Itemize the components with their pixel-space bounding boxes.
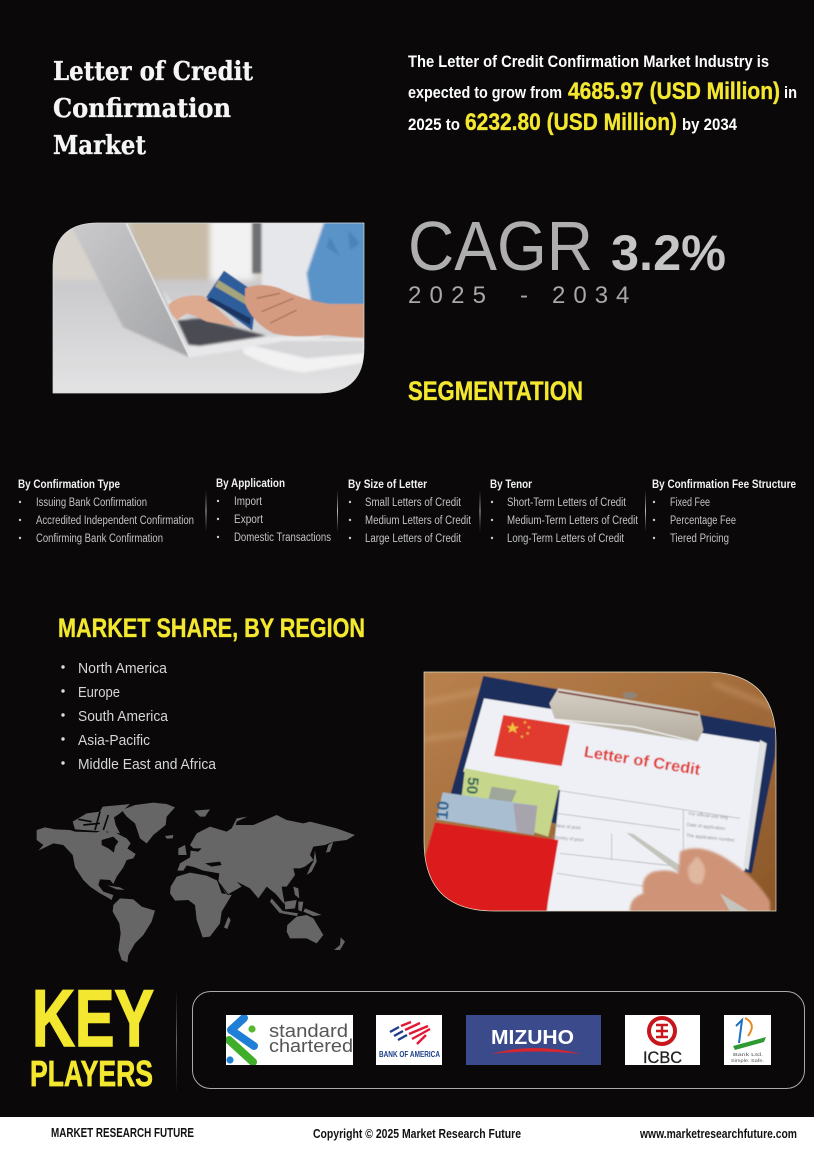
segmentation column: by confirmation type: Issuing Bank Confirmation	[36, 497, 147, 509]
segmentation column: by size of letter	[348, 477, 472, 545]
segmentation column: by tenor	[490, 477, 639, 545]
blurred room background	[54, 223, 348, 392]
market growth statement: The Letter of Credit Confirmation Market Industry is	[408, 52, 769, 71]
footer: MARKET RESEARCH FUTURE	[51, 1126, 194, 1140]
form lines	[557, 791, 740, 887]
banknotes	[460, 768, 559, 837]
photo: letter of credit on clipboard: 10	[432, 800, 453, 820]
shirt and denim	[252, 220, 368, 305]
logo: standard chartered: chartered	[269, 1036, 353, 1056]
logo: regional bank	[724, 1015, 771, 1065]
title: Market	[53, 131, 146, 161]
segmentation column: by tenor: Long-Term Letters of Credit	[507, 533, 625, 545]
region list: Europe	[78, 684, 120, 701]
flag	[494, 715, 570, 766]
logo: icbc: ICBC	[643, 1048, 682, 1067]
form labels	[552, 811, 735, 843]
market growth statement: 4685.97 (USD Million)	[568, 78, 780, 105]
segmentation column: by confirmation fee structure: Tiered Pricing	[670, 533, 729, 545]
segmentation column: by application: Export	[234, 514, 264, 526]
segmentation column: by application: Import	[234, 496, 263, 508]
key players heading	[30, 974, 154, 1094]
segmentation column: by application	[216, 476, 331, 544]
world map	[37, 803, 355, 962]
logo: icbc	[625, 1015, 700, 1067]
logo: bank of america: BANK OF AMERICA	[379, 1050, 440, 1059]
photo: hands with credit card at laptop	[53, 223, 364, 393]
title: Confirmation	[53, 94, 231, 124]
wooden table	[420, 667, 790, 913]
metal clip	[549, 688, 703, 742]
footer	[0, 1117, 814, 1150]
CAGR heading	[408, 207, 726, 285]
form labels: Country of print	[552, 834, 584, 843]
laptop	[68, 220, 323, 357]
footer: Copyright © 2025 Market Research Future	[313, 1126, 521, 1141]
logo: bank of america	[376, 1015, 442, 1065]
region list	[61, 660, 217, 773]
forecast period: -	[520, 282, 528, 309]
forecast period: 2025	[408, 282, 494, 309]
segmentation column: by tenor: Medium-Term Letters of Credit	[507, 515, 639, 527]
market growth statement: 2025 to	[408, 115, 460, 134]
key players panel	[192, 992, 804, 1088]
logo: regional bank: Simple. Safe.	[731, 1058, 764, 1063]
region list: South America	[78, 708, 169, 725]
form labels: The application number	[686, 833, 735, 843]
segmentation column: by application: By Application	[216, 476, 285, 490]
segmentation column: by tenor: By Tenor	[490, 477, 532, 491]
segmentation column: by confirmation fee structure	[652, 477, 796, 545]
red folder	[420, 822, 558, 913]
CAGR heading: CAGR	[408, 207, 593, 285]
key players heading: PLAYERS	[30, 1053, 153, 1094]
left hand	[168, 296, 237, 327]
right hand and arm	[245, 285, 364, 338]
market growth statement: 6232.80 (USD Million)	[465, 109, 677, 136]
market growth statement: by 2034	[682, 115, 737, 134]
segmentation column: by confirmation type: By Confirmation Type	[18, 477, 120, 491]
segmentation column: by confirmation type: Accredited Independent Confirmation	[36, 515, 194, 527]
logo: standard chartered: standard	[269, 1021, 348, 1041]
logo: mizuho	[466, 1015, 601, 1065]
segmentation column: by confirmation type: Confirming Bank Confirmation	[36, 533, 163, 545]
region list: Middle East and Africa	[78, 756, 217, 773]
key players heading: KEY	[32, 974, 154, 1064]
segmentation column: by tenor: Short-Term Letters of Credit	[507, 497, 627, 509]
segmentation column: by size of letter: Small Letters of Credit	[365, 497, 462, 509]
segmentation column: by confirmation type	[18, 477, 194, 545]
region list: North America	[78, 660, 168, 677]
logo: regional bank: Bank Ltd.	[733, 1052, 763, 1057]
document heading: Letter of Credit	[583, 744, 702, 779]
photo: letter of credit on clipboard	[420, 667, 790, 913]
hand	[630, 848, 770, 913]
forecast period: 2034	[552, 282, 637, 309]
form labels: Place of print	[553, 823, 581, 831]
market growth statement: in	[784, 83, 797, 102]
logo: mizuho: MIZUHO	[491, 1027, 574, 1049]
clipboard	[450, 676, 776, 873]
calculator	[243, 338, 365, 373]
segmentation column: by size of letter: Medium Letters of Credit	[365, 515, 472, 527]
forecast period	[408, 282, 637, 309]
form labels: For official use only	[688, 811, 729, 820]
market growth statement	[408, 52, 797, 136]
market share heading: MARKET SHARE, BY REGION	[58, 613, 365, 643]
region list: Asia-Pacific	[78, 732, 150, 749]
segmentation heading: SEGMENTATION	[408, 376, 583, 406]
segmentation column: by application: Domestic Transactions	[234, 532, 331, 544]
market growth statement: expected to grow from	[408, 83, 562, 102]
segmentation column: by confirmation fee structure: Percentage Fee	[670, 515, 736, 527]
logo: standard chartered	[226, 1015, 353, 1065]
paper	[463, 698, 767, 913]
segmentation column: by confirmation fee structure: Fixed Fee	[670, 497, 710, 509]
title	[53, 57, 253, 161]
segmentation column: by size of letter: Large Letters of Credit	[365, 533, 462, 545]
CAGR heading: 3.2%	[611, 225, 726, 281]
credit card	[206, 271, 257, 331]
photo: letter of credit on clipboard: 50	[463, 776, 481, 795]
form labels: Date of application	[687, 822, 726, 831]
segmentation column: by size of letter: By Size of Letter	[348, 477, 427, 491]
title: Letter of Credit	[53, 57, 253, 87]
pen	[626, 832, 680, 872]
